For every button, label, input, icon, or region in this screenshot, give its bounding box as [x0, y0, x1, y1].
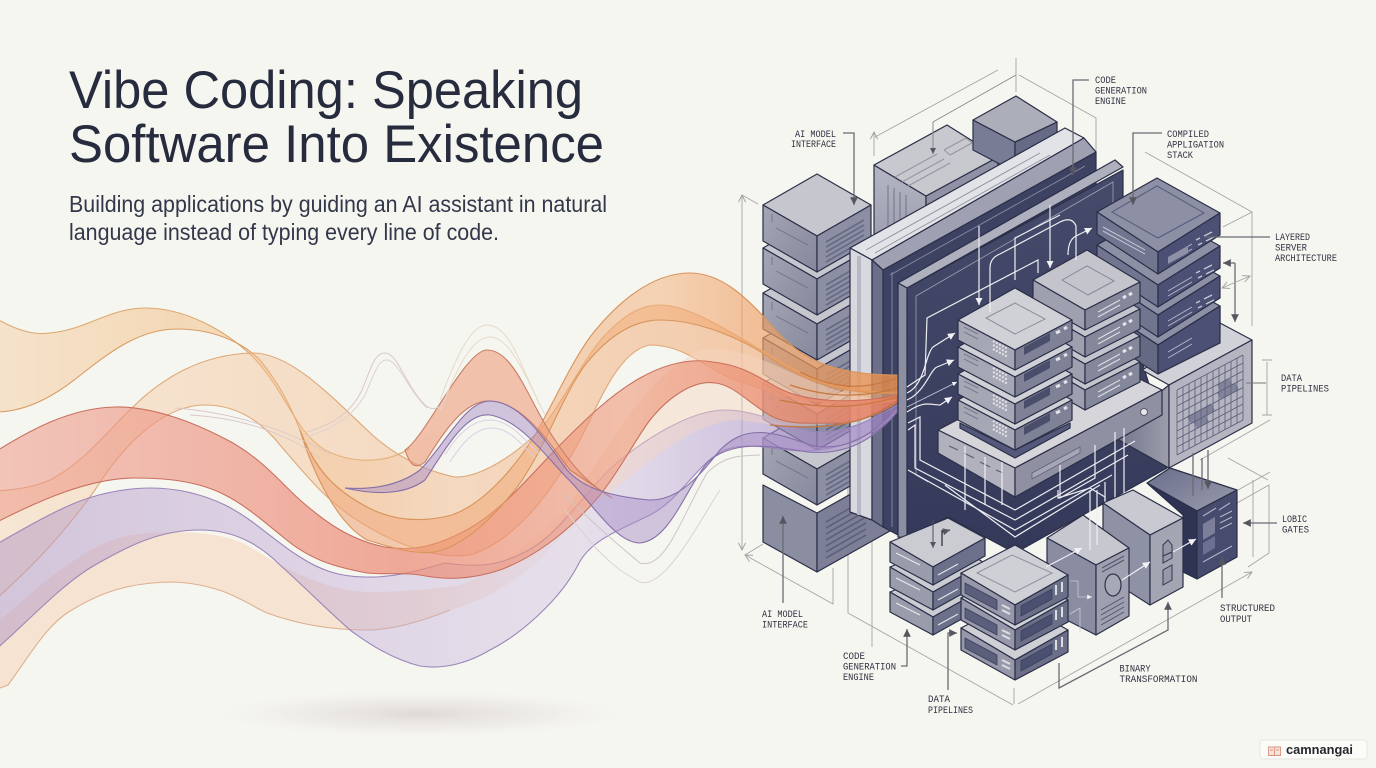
- ribbon: thin wisps: [175, 325, 760, 583]
- box: base: [763, 468, 897, 572]
- label: code generation engine (bottom): CODE: [843, 652, 865, 663]
- box: layer 2: [763, 262, 871, 360]
- label: AI model interface (bottom): AI MODEL: [762, 610, 803, 621]
- ribbon: purple twist: [345, 401, 897, 543]
- label: AI model interface (bottom): [762, 516, 808, 632]
- label: binary transformation: TRANSFORMATION: [1120, 675, 1198, 686]
- box: front tier 3: [958, 342, 1072, 424]
- label: compiled application stack: [1133, 130, 1224, 205]
- label: data pipelines (right): DATA: [1281, 374, 1302, 385]
- icon: open book: [1268, 747, 1280, 756]
- label: data pipelines (bottom): DATA: [928, 695, 950, 706]
- box: small top tier: [890, 518, 985, 585]
- label: code generation engine (top): CODE: [1095, 76, 1116, 87]
- label: code generation engine (bottom): GENERATION: [843, 662, 896, 674]
- ribbon: pale lift: [560, 349, 897, 520]
- label: code generation engine (bottom): [843, 629, 907, 684]
- flow arrows on lower units: [933, 490, 1196, 632]
- label: layered server architecture: SERVER: [1275, 244, 1307, 254]
- label: code generation engine (top): ENGINE: [1095, 97, 1126, 108]
- box: lower top tier: [961, 545, 1068, 625]
- ribbon: small crest orange: [405, 350, 612, 498]
- dark middle panel: [872, 138, 1096, 535]
- box: front tier 4: [958, 368, 1072, 450]
- box: lower tier 2: [961, 570, 1068, 650]
- block: rear tall unit: [874, 125, 998, 300]
- dimension lines behind structure: [742, 58, 1272, 705]
- label: AI model interface (bottom): INTERFACE: [762, 620, 808, 632]
- label: compiled application stack: COMPILED: [1167, 130, 1209, 141]
- box: center tier 4: [1033, 330, 1140, 410]
- block: logic gates: [1147, 468, 1237, 579]
- dark server stack: compiled application stack: [1097, 178, 1220, 374]
- box: layer 5: [763, 407, 871, 505]
- block: binary transformation with dial: [1047, 515, 1129, 635]
- box: tier 4: [1097, 271, 1220, 374]
- box: small tier 3: [890, 568, 985, 635]
- ribbon: upper peach: [0, 308, 452, 519]
- label: structured output: [1220, 557, 1275, 626]
- ribbon: coral main: [0, 361, 897, 578]
- small server stack: [890, 518, 985, 635]
- title: Vibe Coding: Speaking: [69, 61, 583, 120]
- box: center top tier: [1033, 250, 1140, 330]
- block: rear cube: [973, 96, 1057, 172]
- label: compiled application stack: APPLIGATION: [1167, 140, 1224, 152]
- box: center tier 2: [1033, 277, 1140, 357]
- label: AI model interface (top): INTERFACE: [791, 140, 836, 151]
- front server stack: [958, 288, 1072, 458]
- box: top: [763, 174, 871, 272]
- ribbons of natural language: [0, 273, 897, 690]
- watermark badge: camnangai: [1286, 742, 1353, 757]
- label: AI model interface (top): [791, 130, 854, 205]
- label: code generation engine (top): GENERATION: [1095, 86, 1147, 98]
- watermark badge: [1260, 740, 1367, 759]
- box: layer 3: [763, 307, 871, 405]
- block: transformer with gate icons: [1103, 490, 1183, 605]
- label: logic gates: [1243, 515, 1309, 536]
- subtitle: Building applications by guiding an AI assistant in natural: [69, 191, 607, 217]
- ribbon: bottom peach: [0, 480, 595, 690]
- box: small tier 2: [890, 543, 985, 610]
- box: top tier: [1097, 178, 1220, 274]
- label: structured output: STRUCTURED: [1220, 604, 1275, 615]
- label: code generation engine (bottom): ENGINE: [843, 673, 874, 684]
- box: front tier 2: [958, 315, 1072, 397]
- label: layered server architecture: LAYERED: [1275, 233, 1310, 244]
- label: data pipelines (right): [1193, 374, 1329, 496]
- title: [69, 61, 604, 174]
- label: binary transformation: [1059, 602, 1198, 688]
- box: front top tier: [958, 288, 1072, 370]
- ribbon: long peach arc rising to second crest: [0, 305, 897, 600]
- main dark panel with circuits: [898, 160, 1167, 553]
- box: center tier 3: [1033, 304, 1140, 384]
- label: code generation engine (top): [1073, 76, 1147, 175]
- box: lower tier 3: [961, 600, 1068, 680]
- label: structured output: OUTPUT: [1220, 615, 1252, 626]
- circuit traces: [907, 205, 1135, 547]
- grid block: data pipelines: [1110, 323, 1252, 468]
- box: tier 2: [1097, 211, 1220, 307]
- label: logic gates: LOBIC: [1282, 515, 1307, 526]
- ribbon: convergence strands: [770, 372, 897, 427]
- center server stack: [1033, 250, 1140, 410]
- label: data pipelines (bottom): PIPELINES: [928, 706, 973, 717]
- label: data pipelines (bottom): [928, 633, 973, 717]
- light front panel: [850, 128, 1084, 520]
- leader: rear unit arrow: [933, 75, 1016, 154]
- label: layered server architecture: ARCHITECTURE: [1275, 254, 1337, 265]
- box: tier 3: [1097, 241, 1220, 337]
- subtitle: [69, 191, 607, 245]
- label: data pipelines (right): PIPELINES: [1281, 384, 1329, 396]
- box: layer 4: [763, 352, 871, 450]
- label: logic gates: GATES: [1282, 526, 1309, 536]
- ground shadow: [195, 688, 645, 740]
- ribbon: lavender sheet: [0, 405, 897, 667]
- icon: logic gates: [1163, 540, 1172, 585]
- bottom server stack: data pipelines: [961, 545, 1068, 680]
- label: compiled application stack: STACK: [1167, 151, 1193, 162]
- server platform slab: [938, 352, 1162, 497]
- label: layered server architecture: [1205, 233, 1337, 322]
- label: AI model interface (top): AI MODEL: [795, 130, 836, 141]
- subtitle: language instead of typing every line of code.: [69, 219, 499, 245]
- ribbon: orange crest: [300, 273, 897, 553]
- label: binary transformation: BINARY: [1120, 664, 1150, 676]
- title: Software Into Existence: [69, 115, 604, 174]
- data grid: [1177, 355, 1243, 455]
- box: layer 1: [763, 217, 871, 315]
- left server stack: AI model interface: [763, 174, 897, 572]
